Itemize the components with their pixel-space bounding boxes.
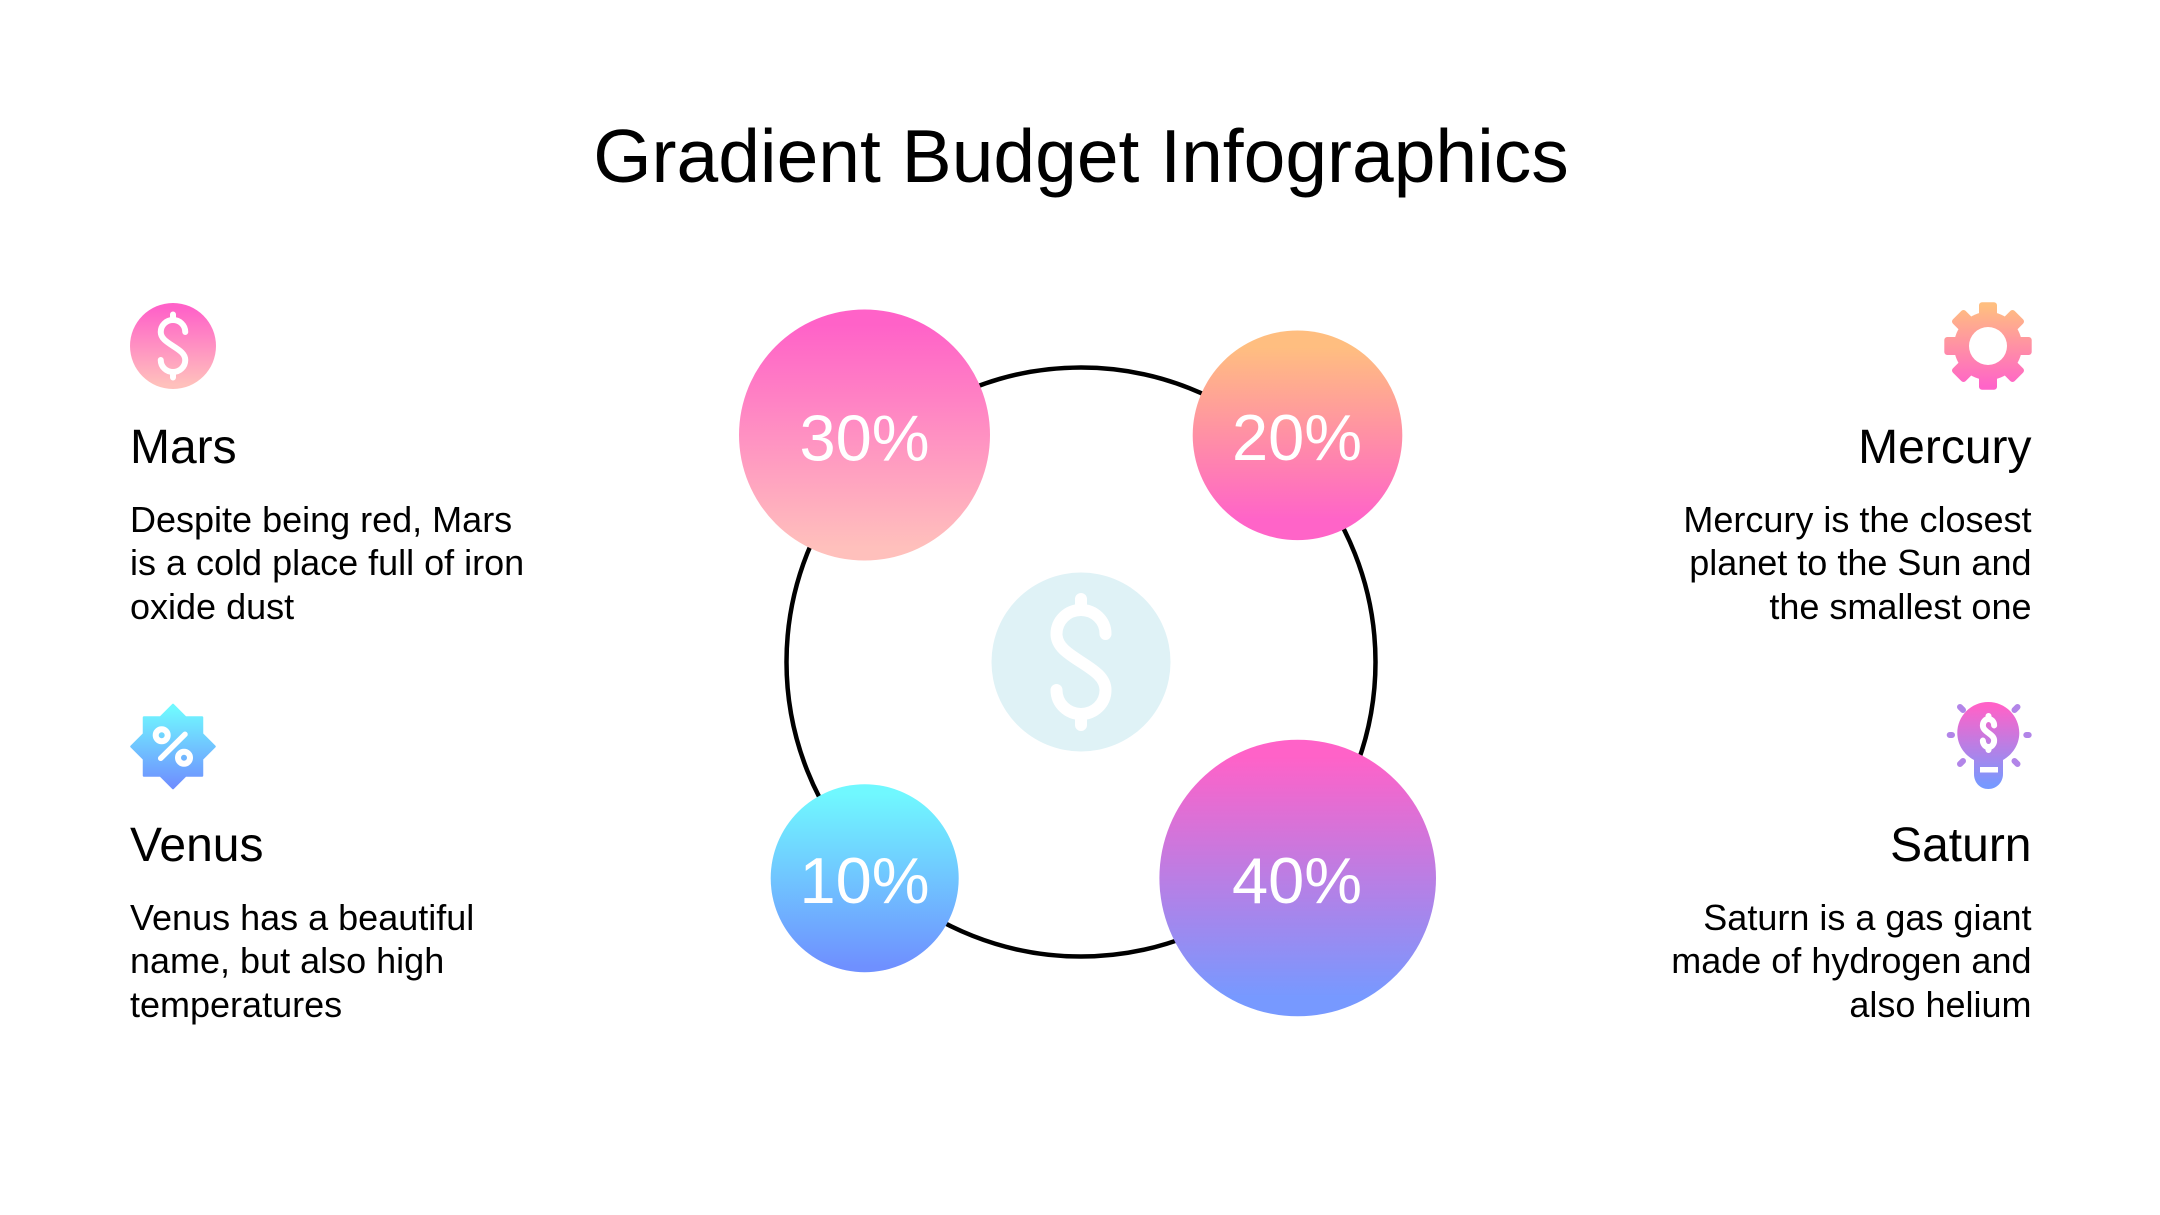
panel: Saturn bbox=[1671, 702, 2032, 1025]
icon: percent badge bbox=[132, 705, 214, 788]
text: Mercury description: the smallest one bbox=[1769, 586, 2032, 627]
text: Saturn description: made of hydrogen and bbox=[1671, 940, 2032, 981]
text: Mars description: oxide dust bbox=[130, 586, 294, 627]
bubble: 20%: 20% bbox=[1232, 401, 1362, 474]
text: Mercury description: planet to the Sun and bbox=[1689, 542, 2032, 583]
icon: dollar coin bbox=[130, 303, 216, 389]
text: Mercury description: Mercury is the closest bbox=[1683, 499, 2032, 540]
bubble: 40%: 40% bbox=[1232, 844, 1362, 917]
bubble: 40% bbox=[1159, 740, 1436, 1016]
heading: Saturn: Saturn bbox=[1890, 819, 2032, 872]
text: Venus description: Venus has a beautiful bbox=[130, 897, 474, 938]
bubble: 30% bbox=[739, 310, 990, 560]
text: Mars description: is a cold place full of iron bbox=[130, 542, 524, 583]
bubble: 20% bbox=[1193, 330, 1402, 540]
text: Venus description: name, but also high bbox=[130, 940, 444, 981]
chart: budget ring bbox=[739, 310, 1436, 1016]
panel: Mars bbox=[130, 303, 524, 627]
bubble: 10% bbox=[771, 784, 959, 972]
heading: Mars: Mars bbox=[130, 421, 237, 474]
text: Saturn description: also helium bbox=[1849, 984, 2032, 1025]
ring outline bbox=[786, 368, 1376, 956]
text: Mars description: Despite being red, Mars bbox=[130, 499, 512, 540]
title: Gradient Budget Infographics bbox=[593, 114, 1569, 198]
bubble: 10%: 10% bbox=[799, 844, 930, 917]
text: Saturn description: Saturn is a gas giant bbox=[1703, 897, 2032, 938]
icon: central dollar bbox=[992, 572, 1170, 752]
heading: Venus: Venus bbox=[130, 819, 263, 872]
icon: gear bbox=[1947, 305, 2029, 387]
text: Venus description: temperatures bbox=[130, 984, 342, 1025]
bubble: 30%: 30% bbox=[799, 402, 930, 474]
icon: light bulb with dollar bbox=[1950, 702, 2029, 789]
heading: Mercury: Mercury bbox=[1858, 421, 2032, 474]
panel: Mercury bbox=[1683, 305, 2032, 627]
panel: Venus bbox=[130, 705, 474, 1025]
